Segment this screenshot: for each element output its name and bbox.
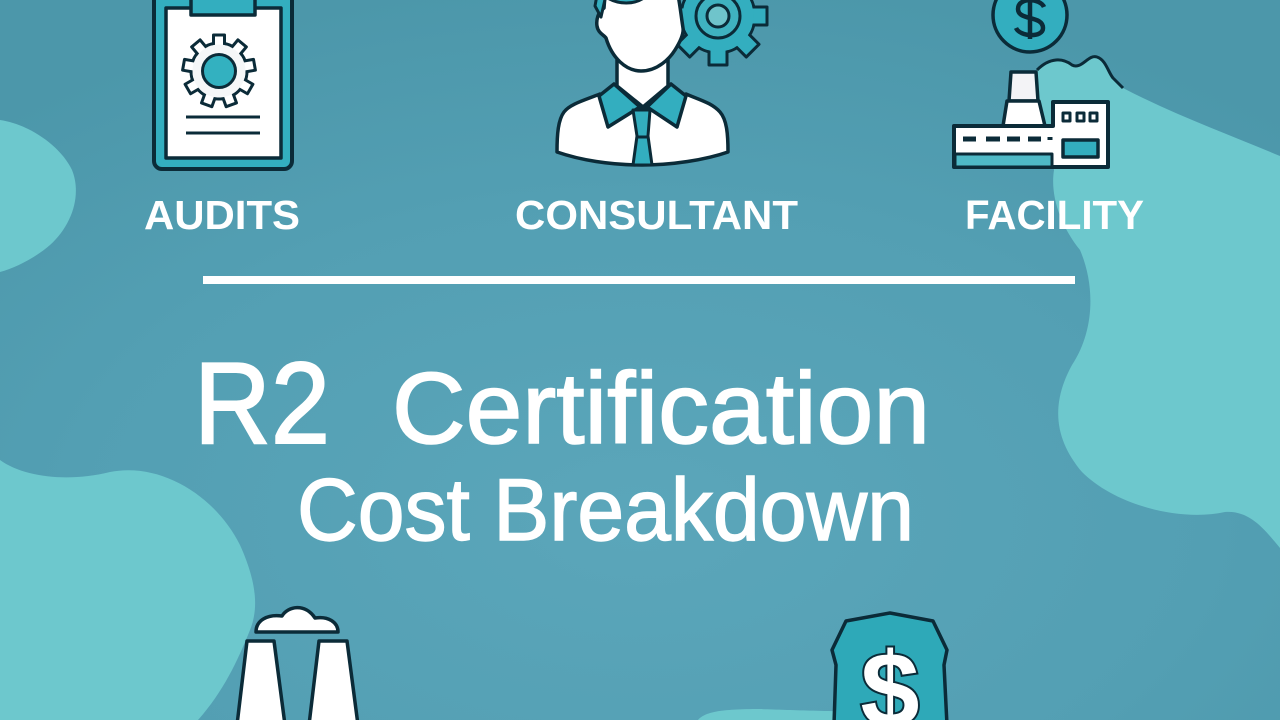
icon: consultant with gear xyxy=(557,0,767,165)
label: facility: FACILITY xyxy=(965,192,1144,238)
icon: facility with dollar coin xyxy=(954,0,1123,167)
icon: audit clipboard xyxy=(154,0,292,169)
divider xyxy=(203,276,1075,284)
title: cost breakdown: Cost Breakdown xyxy=(297,460,914,559)
gear on clipboard xyxy=(183,35,255,107)
icon: smokestacks with cloud xyxy=(237,608,358,720)
title xyxy=(194,338,930,559)
icon: dollar shield xyxy=(832,613,947,720)
title: R2: R2 xyxy=(194,338,330,468)
gear behind consultant xyxy=(669,0,767,65)
label: consultant: CONSULTANT xyxy=(515,192,798,238)
label: audits: AUDITS xyxy=(144,192,300,238)
title: certification: Certification xyxy=(392,353,930,465)
